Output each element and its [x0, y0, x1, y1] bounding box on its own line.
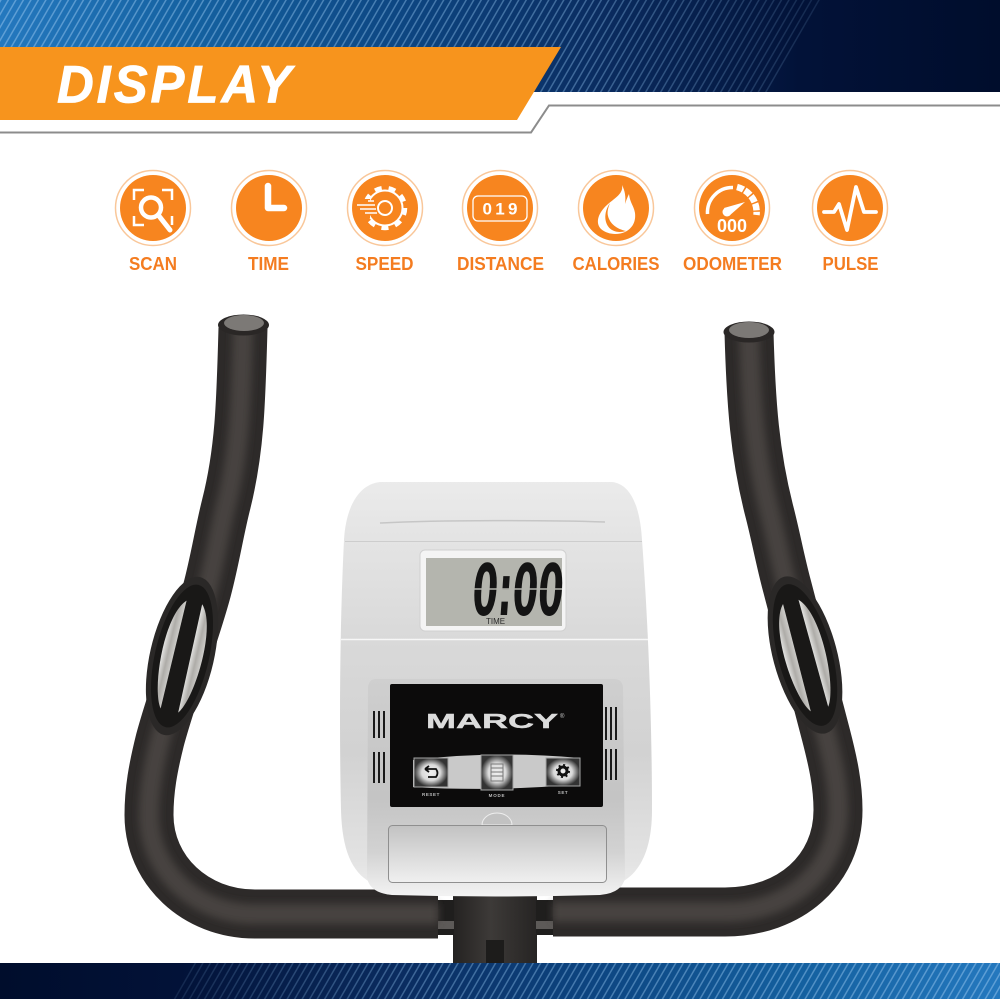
icon: calories — [578, 170, 654, 246]
header banner — [0, 0, 1000, 92]
center stem — [438, 890, 554, 963]
exercise bike handlebar and console — [133, 314, 857, 963]
left pulse grip — [133, 570, 231, 742]
icon: speed — [348, 170, 422, 246]
right handlebar tube — [553, 322, 838, 912]
set button: SET — [558, 790, 568, 795]
header divider line — [0, 106, 1000, 132]
control panel — [367, 679, 625, 896]
icon row — [116, 170, 888, 274]
mode button — [481, 755, 513, 798]
icon: time — [232, 170, 306, 246]
icon: distance: 019 — [482, 200, 518, 218]
left handlebar tube — [149, 314, 438, 914]
label: pulse: PULSE — [822, 254, 878, 274]
reset button: RESET — [422, 792, 440, 797]
icon: distance — [462, 170, 538, 246]
footer banner — [0, 963, 1000, 999]
registered mark: ® — [560, 713, 565, 720]
label: scan: SCAN — [129, 254, 177, 274]
label: distance: DISTANCE — [457, 254, 544, 274]
label: speed: SPEED — [356, 254, 414, 274]
icon: odometer — [694, 170, 770, 246]
left handle cap — [218, 314, 269, 336]
LCD display — [420, 549, 567, 632]
label: odometer: ODOMETER — [683, 254, 782, 274]
label: time: TIME — [248, 254, 289, 274]
icon: scan — [116, 170, 190, 246]
button strip — [413, 754, 580, 789]
right pulse grip — [753, 568, 857, 742]
label: calories: CALORIES — [572, 254, 660, 274]
right vents — [606, 707, 616, 780]
logo: MARCY: MARCY — [426, 710, 559, 733]
left vents — [374, 711, 384, 783]
icon: odometer: 000 — [717, 216, 747, 236]
console body — [340, 482, 652, 896]
title: DISPLAY: DISPLAY — [57, 56, 295, 115]
icon: pulse — [812, 170, 888, 246]
title banner — [0, 47, 561, 120]
LCD readout: 0:00 — [470, 549, 567, 632]
LCD label: TIME — [486, 616, 505, 626]
set button — [546, 758, 580, 795]
reset button — [414, 758, 448, 797]
battery door — [388, 813, 606, 882]
mode button: MODE — [489, 793, 505, 798]
right handle cap — [724, 322, 774, 342]
